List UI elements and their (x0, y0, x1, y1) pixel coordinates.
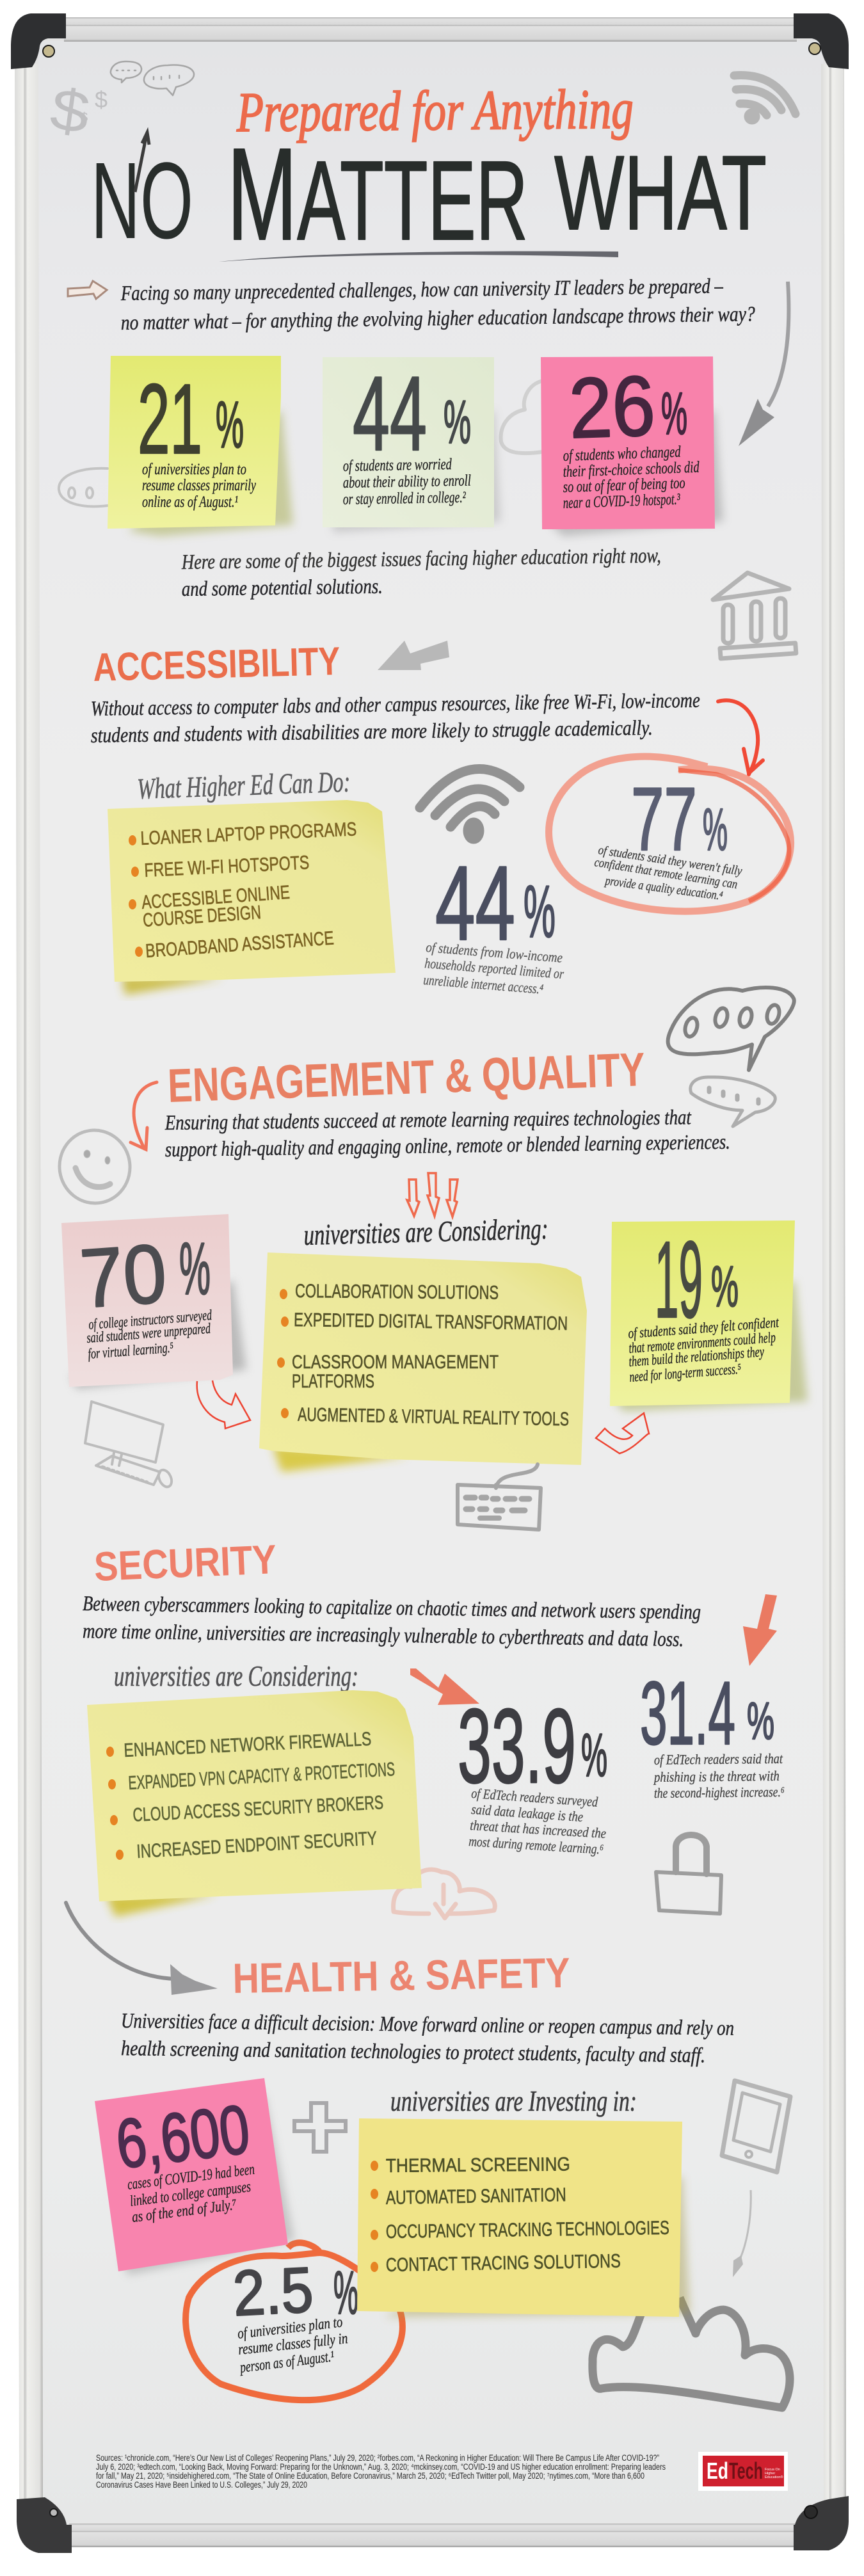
bullet and item: sanitation (371, 2184, 566, 2209)
label: universities are considering (security): universities are Considering: (114, 1660, 358, 1692)
arrow: gray sketch to Accessibility (378, 641, 449, 670)
caption: that remote environments could help (628, 1329, 776, 1356)
arrow: gray curve to Health and Safety (66, 1903, 218, 1995)
caption: as of the end of July.⁷ (131, 2196, 238, 2226)
bullet and item: occupancy tracking: OCCUPANCY TRACKING TECHNOLOGIES (386, 2218, 669, 2243)
icon: plus sign (294, 2103, 346, 2152)
bullet and item: contact tracing: CONTACT TRACING SOLUTIONS (386, 2251, 621, 2276)
stat: 31.4 percent (640, 1663, 785, 1801)
bullet and item: VPN: EXPANDED VPN CAPACITY & PROTECTIONS (128, 1759, 396, 1794)
corner: bottom right (794, 2496, 849, 2550)
caption: of students from low-income (426, 939, 563, 966)
arrow: solid coral down (743, 1594, 777, 1666)
security body text (83, 1592, 701, 1651)
bullet and item: online course design: COURSE DESIGN (142, 902, 262, 931)
bullet and item: hotspots (131, 852, 310, 881)
caption (237, 2314, 349, 2376)
number: 31.4 (640, 1663, 735, 1763)
heading: Health and Safety: HEALTH & SAFETY (232, 1949, 570, 2002)
caption (142, 461, 257, 511)
bullet and item: collaboration: COLLABORATION SOLUTIONS (295, 1281, 499, 1304)
intro text: Facing so many unprecedented challenges, how can university IT leaders be prepared – (120, 275, 723, 305)
corner: bottom left (17, 2497, 72, 2553)
icon: pink cloud download (394, 1869, 495, 1918)
arrow: intro curve (739, 282, 788, 446)
caption: of universities plan to (142, 461, 246, 478)
icon: desktop computer (85, 1402, 174, 1489)
intro text (120, 275, 755, 335)
arrow: red outlined right (596, 1413, 649, 1453)
logo: EdTech: Ed (707, 2458, 728, 2484)
caption: provide a quality education.⁴ (604, 874, 724, 903)
transition text: and some potential solutions. (182, 575, 383, 601)
caption: person as of August.¹ (238, 2348, 335, 2376)
caption: said students were unprepared (86, 1320, 211, 1346)
arrow: red curve to 77 percent (718, 700, 763, 774)
caption (423, 939, 564, 997)
caption: need for long-term success.⁵ (629, 1361, 742, 1385)
sticky note: 21 percent: % (216, 388, 244, 461)
stat: 44 percent low-income: % (524, 871, 556, 953)
caption: them build the relationships they (628, 1343, 765, 1370)
sources text: for fall,” May 21, 2020; ⁵insidehighered.com, “The State of Online Education, Before Coronavirus,” March 25, 2020; ⁶EdTech Twitter poll, May 2020; ⁷nytimes.com, “More than 6,600 (96, 2471, 644, 2481)
icon: large speech bubble (668, 988, 794, 1070)
bullet and item: VPN (108, 1759, 396, 1794)
bullet and item: online course design (129, 882, 291, 931)
icon: intro arrow (68, 281, 107, 299)
stat circle: 2.5 percent (186, 2243, 403, 2400)
sticky note: 26 percent: % (661, 380, 687, 447)
sources text: July 6, 2020; ³edtech.com, “Looking Back, Moving Forward: Preparing for the Unknown,” Aug. 3, 2020; ⁴mckinsey.com, “COVID-19 and US higher education enrollment: Preparing leaders (96, 2462, 666, 2472)
bullet and item: thermal screening: THERMAL SCREENING (386, 2154, 570, 2177)
bullet and item: online course design: ACCESSIBLE ONLINE (141, 882, 291, 913)
caption: for virtual learning.⁵ (87, 1340, 174, 1362)
arrows: three outlined downward (407, 1173, 458, 1217)
list (106, 1729, 396, 1862)
stat circle: 2.5 percent: % (333, 2259, 358, 2327)
sources text: Sources: ¹chronicle.com, “Here’s Our New List of Colleges’ Reopening Plans,” July 29, 2020; ²forbes.com, “A Reckoning in Higher Education: Will There Be Campus Life After COVID-19?” (96, 2453, 659, 2463)
number: 2.5 (231, 2254, 315, 2330)
security body text: Between cyberscammers looking to capitalize on chaotic times and network users spending (83, 1592, 701, 1624)
label: universities are investing in: universities are Investing in: (390, 2084, 637, 2117)
bullet and item: firewalls (106, 1729, 372, 1761)
heading: Engagement and Quality: ENGAGEMENT & QUALITY (167, 1043, 646, 1112)
caption: of EdTech readers surveyed (471, 1785, 599, 1810)
caption: near a COVID-19 hotspot.³ (563, 491, 680, 512)
sticky note: 70 percent: % (179, 1228, 211, 1310)
number: 44 (435, 844, 515, 962)
caption (127, 2161, 255, 2226)
icon: wifi (420, 769, 520, 839)
sticky note: 6,600 cases (95, 2078, 294, 2275)
bullet and item: endpoint (116, 1828, 378, 1862)
bullet and item: loaner laptops (129, 819, 357, 849)
sticky note: security list (87, 1690, 422, 1917)
number: % (747, 1692, 774, 1750)
bullet and item: broadband (135, 927, 335, 962)
stat: 44 percent low-income (423, 844, 564, 997)
caption: most during remote learning.⁶ (468, 1833, 604, 1857)
caption: of students who changed (563, 444, 681, 465)
icon: smiley face (55, 1126, 134, 1208)
stat: 33.9 percent (458, 1687, 607, 1857)
caption (468, 1785, 607, 1857)
caption: confident that remote learning can (593, 855, 739, 892)
orange hand-drawn circle (186, 2243, 403, 2400)
caption (653, 1750, 785, 1801)
bullet and item: digital transformation (281, 1309, 568, 1334)
right rail (821, 64, 846, 2502)
caption: of universities plan to (237, 2314, 344, 2342)
bullet and item: classroom management: CLASSROOM MANAGEMENT (292, 1352, 499, 1373)
bullet and item: classroom management: PLATFORMS (292, 1371, 374, 1392)
security body text: more time online, universities are increasingly vulnerable to cyberthreats and data loss. (83, 1620, 684, 1651)
health body text: Universities face a difficult decision: Move forward online or reopen campus and rely on (121, 2010, 734, 2040)
caption: online as of August.¹ (142, 493, 238, 511)
number: 6,600 (112, 2090, 253, 2183)
caption: of students said they felt confident (628, 1314, 780, 1341)
word: No: NO (91, 140, 193, 262)
caption (628, 1314, 780, 1385)
icon: dollar signs: $ (95, 86, 108, 113)
bullet and item: hotspots: FREE WI-FI HOTSPOTS (144, 852, 310, 881)
icon: keyboard (458, 1464, 541, 1530)
bottom rail (69, 2524, 797, 2547)
caption: of college instructors surveyed (88, 1307, 212, 1332)
caption: of EdTech readers said that (654, 1750, 783, 1768)
number: 44 (353, 355, 427, 472)
logo: EdTech: Focus On (765, 2468, 780, 2472)
accessibility body text: students and students with disabilities are more likely to struggle academically. (91, 717, 653, 748)
bullet and item: loaner laptops: LOANER LAPTOP PROGRAMS (140, 819, 357, 849)
icon: dollar signs (47, 76, 108, 147)
accessibility body text (91, 689, 700, 748)
arrow: red outlined left (197, 1380, 250, 1428)
corner: top left (11, 13, 66, 69)
corner: top right (794, 13, 849, 69)
logo: EdTech: Education® (765, 2475, 783, 2479)
sticky note: 70 percent (61, 1214, 246, 1389)
bullet and item: sanitation: AUTOMATED SANITATION (386, 2184, 566, 2209)
arrow: solid coral diagonal (410, 1668, 479, 1705)
number: 19 (655, 1219, 703, 1341)
number: 70 (77, 1226, 170, 1325)
caption: threat that has increased the (470, 1817, 607, 1841)
transition text (181, 545, 661, 601)
icon: dollar signs: $ (47, 76, 93, 147)
title underline (219, 252, 618, 262)
sticky note: universities are considering (259, 1252, 587, 1472)
list (277, 1281, 569, 1430)
bullet and item: broadband: BROADBAND ASSISTANCE (145, 927, 335, 962)
number (655, 1219, 739, 1341)
caption: of students said they weren't fully (597, 843, 743, 879)
bullet and item: augmented reality: AUGMENTED & VIRTUAL REALITY TOOLS (298, 1404, 569, 1430)
sticky note: what higher ed can do (108, 800, 396, 995)
bullet and item: augmented reality (281, 1404, 569, 1430)
bullet and item: endpoint: INCREASED ENDPOINT SECURITY (136, 1828, 378, 1862)
sticky note: 44 percent (323, 355, 500, 532)
arrow: red curve left of Engagement (131, 1082, 157, 1149)
engagement body text: support high-quality and engaging online, remote or blended learning experiences. (165, 1131, 730, 1162)
sources text (96, 2453, 666, 2490)
top rail (64, 17, 797, 42)
sticky note: universities are investing in (357, 2118, 690, 2317)
caption: phishing is the threat with (653, 1768, 780, 1785)
caption: resume classes fully in (237, 2330, 349, 2358)
health body text: health screening and sanitation technologies to protect students, faculty and staff. (121, 2037, 705, 2067)
icon: top speech bubbles (111, 61, 194, 95)
caption: so out of fear of being too (563, 474, 685, 496)
red hand-drawn circle (549, 756, 791, 911)
bullet and item: classroom management (277, 1352, 499, 1392)
left rail (15, 64, 43, 2502)
bullet and item: cloud access: CLOUD ACCESS SECURITY BROKERS (132, 1792, 384, 1826)
word: Matter: MATTER (227, 121, 528, 268)
engagement body text (164, 1106, 730, 1162)
logo: EdTech (698, 2452, 788, 2491)
icon: large cloud (593, 2298, 790, 2408)
list (129, 819, 357, 962)
number: 77 (631, 769, 697, 869)
icon: university building (713, 573, 796, 659)
sticky note: 19 percent (610, 1219, 808, 1411)
caption: resume classes primarily (142, 477, 257, 494)
caption: or stay enrolled in college.² (343, 489, 466, 508)
sticky note: 21 percent (108, 356, 293, 536)
engagement body text: Ensuring that students succeed at remote learning requires technologies that (164, 1106, 692, 1135)
bullet and item: firewalls: ENHANCED NETWORK FIREWALLS (124, 1729, 372, 1761)
caption: said data leakage is the (471, 1801, 584, 1825)
caption (593, 843, 743, 903)
number: % (444, 388, 471, 456)
icon: faded cloud (501, 381, 543, 453)
caption (563, 444, 700, 512)
label: What Higher Ed Can Do: What Higher Ed Can Do: (137, 765, 351, 805)
caption: of students are worried (343, 456, 452, 475)
label: universities are considering (engagement): universities are Considering: (303, 1212, 548, 1251)
number: % (711, 1255, 739, 1319)
icon: tablet (722, 2081, 790, 2172)
caption: the second-highest increase.⁶ (654, 1784, 785, 1801)
icon: faded bubble left (59, 468, 108, 506)
bullet and item: digital transformation: EXPEDITED DIGITAL TRANSFORMATION (294, 1309, 568, 1334)
heading: Accessibility: ACCESSIBILITY (93, 639, 340, 690)
text: % (581, 1722, 607, 1789)
icon: top wifi (734, 76, 796, 120)
arrow from N (135, 132, 149, 192)
icon: padlock (656, 1835, 721, 1914)
health body text (121, 2010, 734, 2067)
title: No Matter What (91, 121, 767, 268)
icon: dollar signs: $ (81, 111, 88, 125)
stat circle: 77 percent: % (703, 796, 728, 863)
caption (343, 456, 471, 508)
caption: about their ability to enroll (343, 472, 471, 492)
logo: EdTech: Higher (765, 2472, 775, 2476)
intro text: no matter what – for anything the evolving higher education landscape throws their way? (121, 303, 755, 335)
bullet and item: collaboration (280, 1281, 499, 1304)
logo: EdTech: Tech (729, 2458, 763, 2484)
caption: cases of COVID-19 had been (127, 2161, 255, 2193)
number: 26 (568, 358, 657, 456)
stat circle: 77 percent (549, 756, 791, 911)
list (371, 2154, 669, 2276)
sources text: Coronavirus Cases Have Been Linked to U.S. Colleges,” July 29, 2020 (96, 2480, 307, 2490)
caption: households reported limited or (424, 955, 564, 982)
caption: their first-choice schools did (563, 459, 700, 481)
sticky note: 26 percent (541, 356, 723, 536)
caption (86, 1307, 212, 1362)
bullet and item: cloud access (110, 1792, 384, 1826)
arrow: thin gray down (733, 2190, 751, 2277)
word: What: WHAT (554, 134, 767, 252)
heading: Security: SECURITY (93, 1536, 277, 1590)
number: 33.9 (458, 1687, 576, 1805)
icon: small speech bubble (691, 1077, 775, 1126)
transition text: Here are some of the biggest issues facing higher education right now, (181, 545, 661, 574)
caption: linked to college campuses (129, 2179, 252, 2210)
accessibility body text: Without access to computer labs and other campus resources, like free Wi-Fi, low-income (91, 689, 700, 721)
subtitle: Prepared for Anything: Prepared for Anything (236, 79, 634, 144)
bullet and item: occupancy tracking (371, 2218, 669, 2243)
number: 21 (138, 364, 202, 474)
caption: unreliable internet access.⁴ (423, 972, 544, 997)
